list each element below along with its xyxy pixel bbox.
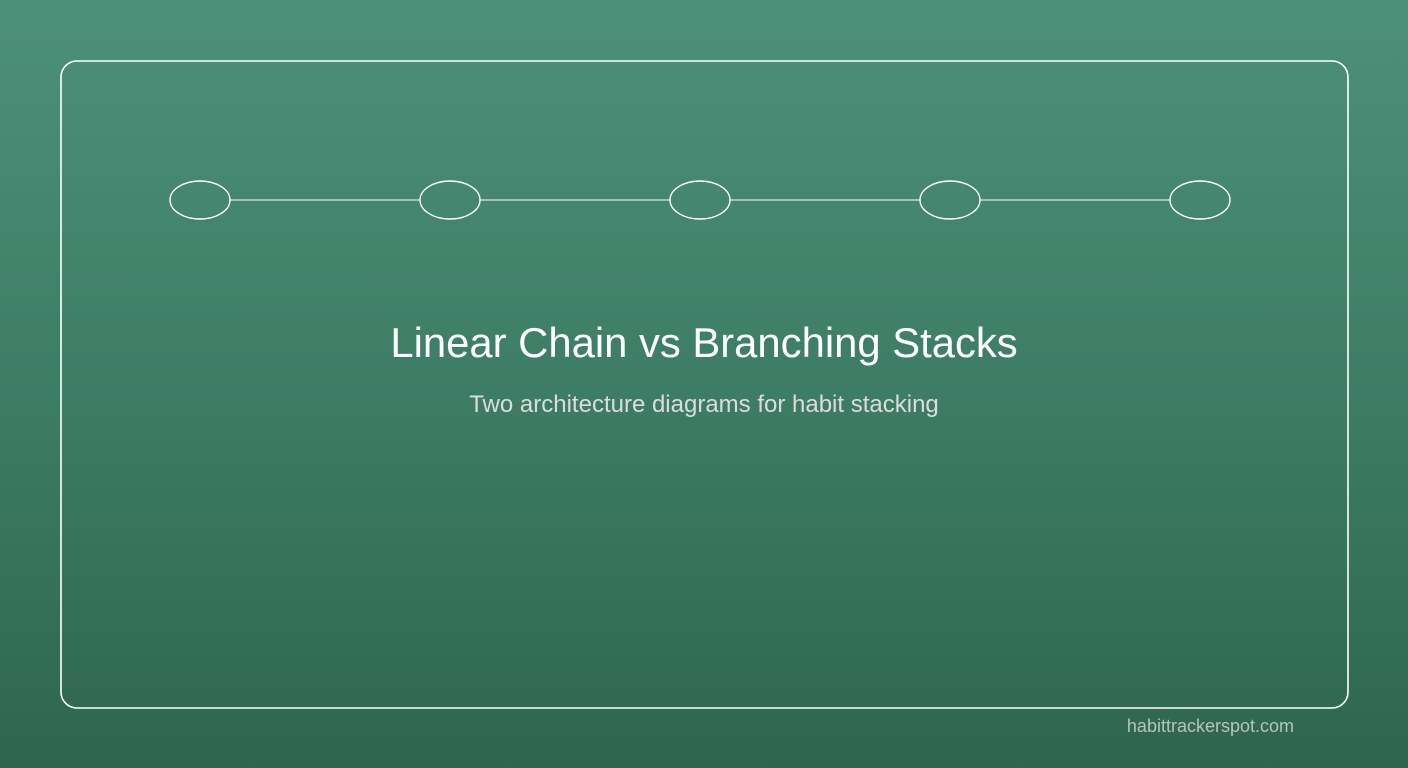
- footer url: habittrackerspot.com: [1127, 716, 1294, 736]
- linear chain diagram: [170, 181, 1230, 219]
- frame panel: [61, 61, 1348, 708]
- subtitle: Two architecture diagrams for habit stacking: [469, 391, 939, 418]
- title: Linear Chain vs Branching Stacks: [390, 319, 1018, 366]
